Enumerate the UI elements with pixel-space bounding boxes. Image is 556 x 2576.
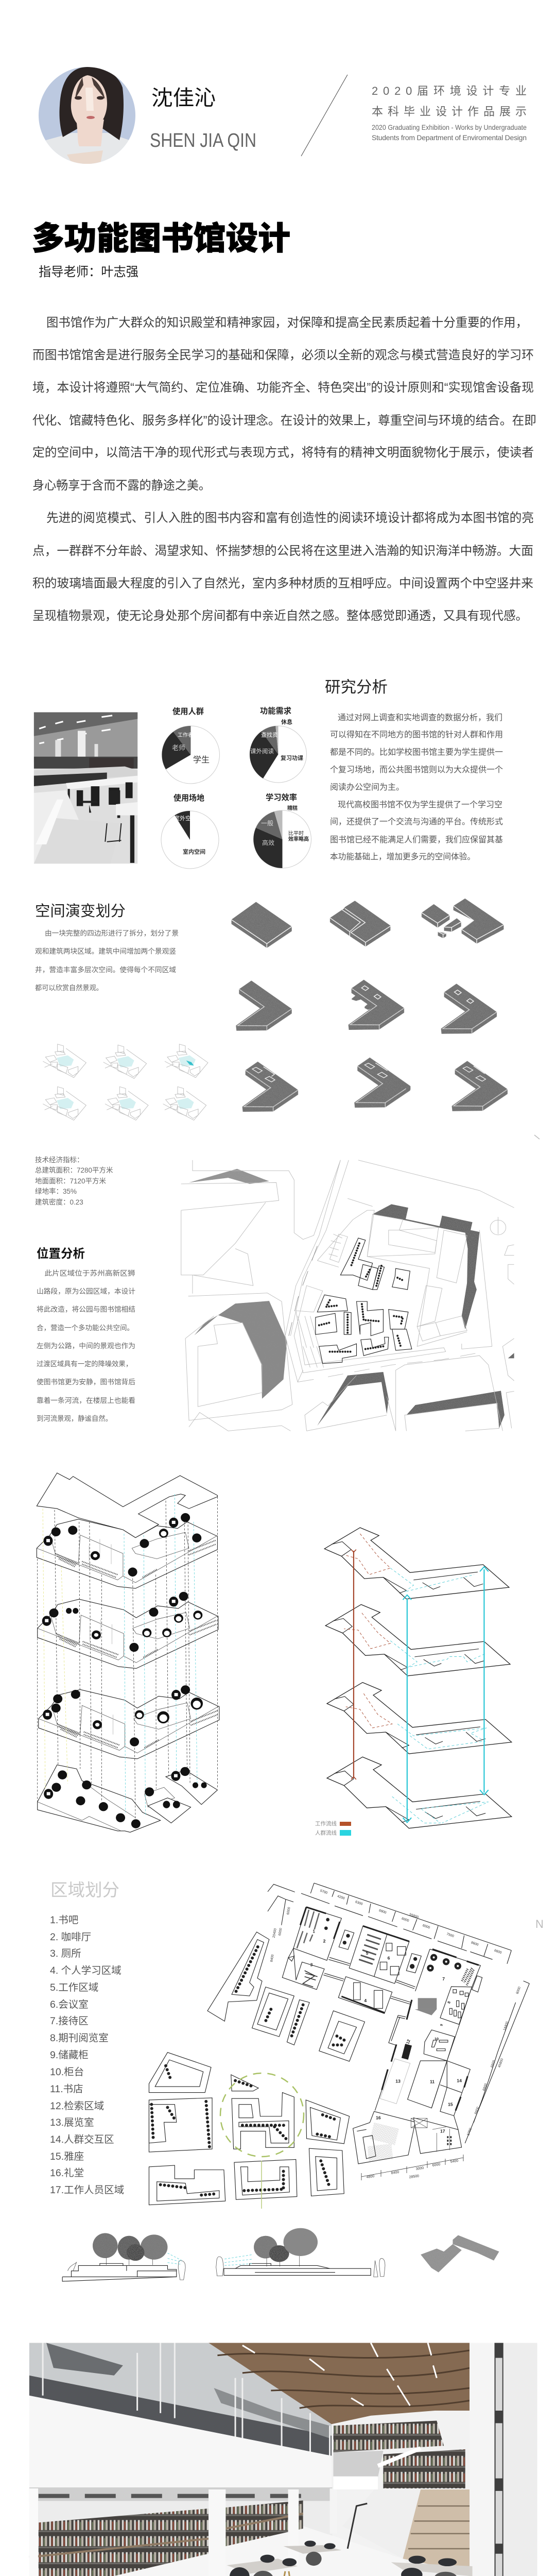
pie chart: function needs: 课外阅读 [250, 748, 274, 755]
zoning list: 8.期刊阅览室 [50, 2032, 109, 2044]
north mark: N [535, 1918, 544, 1930]
floor plan: 1 [312, 1929, 315, 1934]
zoning list: 14.人群交互区 [50, 2134, 114, 2145]
exhibition caption: 本科毕业设计作品展示 [372, 105, 527, 118]
name: 沈佳沁 [151, 86, 216, 110]
floor plan: 17 [440, 2128, 445, 2133]
floor plan: 6000 [422, 1924, 430, 1930]
technical indicators: 建筑密度：0.23 [35, 1198, 83, 1206]
research text: 个复习场地，而公共图书馆则以为大众提供一个 [330, 765, 503, 774]
bottom dimensions: 6000 [432, 2163, 441, 2167]
location text: 使图书馆更为安静，图书馆背后 [37, 1378, 135, 1386]
zoning list: 7.接待区 [50, 2015, 89, 2027]
pie chart: study efficiency: 高效 [262, 839, 274, 846]
pie chart: study efficiency [253, 792, 311, 868]
zoning list: 1.书吧 [50, 1914, 78, 1926]
intro text: 代化、馆藏特色化、服务多样化”的设计理念。在设计的效果上，尊重空间与环境的结合。在即 [32, 414, 536, 428]
massing diagrams [231, 899, 508, 1112]
zoning list: 13.展览室 [50, 2117, 94, 2128]
floor plan: 15 [448, 2102, 453, 2107]
rendering: reading hall [29, 2343, 537, 2576]
title: 多功能图书馆设计 [32, 221, 290, 257]
location text [37, 1269, 135, 1422]
zoning list: 17.工作人员区域 [50, 2184, 124, 2196]
legend: circulation: 人群流线 [315, 1829, 337, 1836]
small axonometric sketches [43, 1044, 208, 1120]
bottom dimensions: 5400 [450, 2159, 459, 2164]
heading: spatial evolution: 空间演变划分 [35, 903, 126, 920]
location text: 将此改造，将公园与图书馆相结 [37, 1306, 135, 1313]
technical indicators: 总建筑面积：7280平方米 [35, 1166, 113, 1174]
floor plan: 8400 [270, 1954, 275, 1962]
pie chart: study efficiency: 一般 [261, 819, 273, 827]
zoning list: 11.书店 [50, 2083, 83, 2095]
intro text: 境，本设计将遵照“大气简约、定位准确、功能齐全、特色突出”的设计原则和“实现馆舍设备现 [32, 381, 534, 395]
section elevations [62, 2228, 499, 2281]
bottom dimensions [361, 2155, 463, 2180]
research text: 通过对网上调查和实地调查的数据分析，我们 [338, 713, 502, 722]
pie chart: function needs: 查找资料 [261, 731, 284, 738]
pie chart: function needs [250, 706, 307, 783]
location text: 山路段，原为公园区域，本设计 [37, 1287, 135, 1295]
floor plan: 8600 [471, 1941, 479, 1947]
bottom dimensions: 28500 [409, 2174, 420, 2179]
isometric exploded floors [37, 1473, 219, 1832]
floor plan: 20400 [272, 1928, 277, 1938]
slash divider [301, 75, 348, 156]
zoning list: 5.工作区域 [50, 1982, 98, 1993]
exhibition caption [372, 84, 527, 142]
pie chart: users: 使用人群 [172, 707, 204, 716]
landscape beds [149, 1932, 364, 2205]
intro text: 积的玻璃墙面最大程度的引入了自然光，室内多种材质的互相呼应。中间设置两个中空竖井来 [32, 577, 533, 590]
floor plan: 6000 [401, 1917, 410, 1923]
floor plan: 6600 [494, 1949, 502, 1955]
heading: research analysis: 研究分析 [325, 679, 388, 696]
pie chart: venue [161, 793, 219, 869]
pie chart: users [162, 707, 219, 784]
floor plan: 6600 [482, 2083, 488, 2091]
tick mark [534, 1135, 540, 1139]
panel: spatial evolution [35, 899, 508, 1120]
location text: 到河流景观，静谧自然。 [37, 1414, 112, 1422]
zoning list: 4. 个人学习区域 [50, 1965, 121, 1976]
intro text: 而图书馆馆舍是进行服务全民学习的基础和保障，必须以全新的观念与模式营造良好的学习环 [32, 348, 534, 362]
pie chart: venue: 室内空间 [183, 848, 205, 855]
floor plan: 3 [310, 1962, 313, 1968]
floor plan: 16 [376, 2115, 381, 2120]
work circulation [344, 1534, 392, 1780]
floor plan: 14 [457, 2078, 462, 2083]
research text: 间，还提供了一个交流与沟通的平台。传统形式 [330, 817, 503, 826]
floor plan: 5 [366, 1951, 369, 1956]
pie chart: study efficiency: 学习效率 [266, 792, 297, 802]
floor plan: 6300 [355, 1900, 363, 1906]
pie chart: users: 工作者 [178, 732, 193, 738]
pinyin name: SHEN JIA QIN [150, 130, 256, 151]
research text: 现代高校图书馆不仅为学生提供了一个学习空 [338, 800, 502, 809]
research text: 本功能基础上，增加更多元的空间体验。 [330, 852, 475, 861]
floor plan: 4 [364, 1998, 367, 2003]
research text [330, 713, 503, 861]
pie chart: venue: 室外空间 [174, 815, 197, 822]
zoning list: 9.储藏柜 [50, 2049, 89, 2061]
floor plan: 6000 [278, 1928, 283, 1936]
floor plan: 7 [442, 1976, 445, 1981]
research text: 阅读办公空间为主。 [330, 783, 404, 792]
evolution text [35, 929, 179, 992]
floor plan: 7500 [446, 1933, 455, 1938]
intro text: 呈现植物景观，使无论身处那个房间都有中亲近自然之感。整体感觉即通透，又具有现代感。 [32, 609, 528, 623]
floor plan: 5700 [320, 1889, 328, 1895]
evolution text: 井，营造丰富多层次空间。使得每个不同区域 [35, 965, 176, 974]
zoning list: 16.礼堂 [50, 2167, 84, 2179]
evolution text: 由一块完整的四边形进行了拆分，划分了景 [45, 929, 179, 937]
floor plan: 45800 [498, 2058, 505, 2068]
research text: 都是不同的。比如学校图书馆主要为学生提供一 [330, 748, 503, 757]
legend: circulation [315, 1820, 351, 1836]
pie chart: venue: 使用场地 [173, 793, 204, 803]
evolution text: 观和建筑两块区域。建筑中间增加两个景观竖 [35, 947, 176, 955]
research photo [34, 713, 137, 863]
pie chart: study efficiency: 效率略高 [288, 836, 309, 842]
pie chart: study efficiency: 糟糕 [287, 805, 298, 811]
zoning list: 6.会议室 [50, 1999, 89, 2010]
advisor: 指导老师：叶志强 [39, 265, 138, 279]
floor plan: 11 [430, 2079, 435, 2084]
header [39, 67, 527, 164]
intro text: 身心畅享于含而不露的静途之美。 [32, 479, 211, 493]
research text: 图书馆已经不能满足人们需要，我们应保留其基 [330, 835, 503, 844]
zoning list: 3. 厕所 [50, 1948, 81, 1959]
icons: floor markers [42, 1513, 207, 1828]
floor plan: 6 [388, 1955, 390, 1960]
panel: location [35, 1135, 540, 1431]
floor plan: 8 [446, 2001, 451, 2004]
floor plan: 6900 [378, 1909, 387, 1915]
panel: research analysis [34, 679, 503, 869]
location text: 靠着一条河流，在楼层上也能看 [37, 1396, 135, 1404]
pie chart: function needs: 功能需求 [260, 706, 291, 716]
circulation floor plans [324, 1528, 512, 1828]
pie chart: users: 学生 [193, 755, 210, 765]
floor plan: 6600 [490, 2060, 496, 2068]
intro text: 定的空间中，以简洁干净的现代形式与表现方式，将特有的精神文明面貌物化于展示，使读者 [32, 446, 534, 460]
bottom dimensions: 8400 [391, 2171, 399, 2175]
intro text: 图书馆作为广大群众的知识殿堂和精神家园，对保障和提高全民素质起着十分重要的作用， [46, 316, 528, 330]
research text: 可以得知在不同地方的图书馆的针对人群和作用 [330, 730, 503, 739]
heading: location analysis: 位置分析 [37, 1246, 85, 1260]
pie chart: users: 老师 [172, 744, 185, 752]
highlight circle [220, 2073, 304, 2209]
evolution text: 都可以欣赏自然景观。 [35, 984, 103, 992]
location text: 过渡区域具有一定的降噪效果， [37, 1360, 132, 1368]
floor plan: 10 [435, 2037, 439, 2041]
exhibition caption: Students from Department of Enviromental Design [372, 133, 527, 142]
technical indicators: 绿地率：35% [35, 1187, 77, 1195]
floor plan: 55800 [409, 1913, 419, 1920]
exhibition caption: 2020届环境设计专业 [372, 84, 527, 97]
panel: zoning [50, 1881, 544, 2281]
people circulation [390, 1567, 489, 1823]
zoning list: 10.柜台 [50, 2066, 84, 2078]
technical indicators: 地面面积：7120平方米 [35, 1177, 107, 1185]
pie chart: study efficiency: 比平时 [288, 831, 304, 837]
floor plan: 4200 [337, 1894, 345, 1901]
zoning list [50, 1914, 124, 2196]
location text: 此片区域位于苏州高新区狮 [44, 1269, 135, 1277]
pie chart: function needs: 复习功课 [281, 754, 303, 761]
intro text: 先进的阅览模式、引人入胜的图书内容和富有创造性的阅读环境设计都将成为本图书馆的亮 [46, 511, 534, 525]
zoning list: 12.检索区域 [50, 2100, 104, 2112]
intro text: 点，一群群不分年龄、渴望求知、怀揣梦想的公民将在这里进入浩瀚的知识海洋中畅游。大面 [32, 544, 533, 558]
floor plan: 14400 [503, 2021, 510, 2031]
floor plan: 13 [395, 2079, 401, 2084]
floor plan: 5700 [467, 2127, 473, 2136]
portrait photo [39, 67, 135, 164]
bottom dimensions: 3000 [415, 2166, 424, 2171]
technical indicators [35, 1156, 113, 1206]
site plan [181, 1160, 514, 1431]
floor plan: 12 [405, 2039, 411, 2045]
floor plan [268, 1883, 529, 2164]
zoning list: 2. 咖啡厅 [50, 1931, 91, 1943]
floor plan: 6000 [286, 1907, 291, 1915]
location text: 合，营造一个多功能公共空间。 [37, 1324, 134, 1332]
legend: circulation: 工作流线 [315, 1820, 337, 1827]
exhibition caption: 2020 Graduating Exhibition - Works by Undergraduate [372, 123, 527, 131]
floor plan: 9 [440, 2024, 444, 2027]
zoning list: 15.雅座 [50, 2151, 84, 2162]
location text: 左侧为公路，中间的景观也作为 [37, 1342, 135, 1350]
technical indicators: 技术经济指标： [35, 1156, 83, 1164]
intro text [32, 316, 536, 623]
pie chart: function needs: 休息 [281, 718, 292, 725]
bottom dimensions: 4800 [366, 2175, 375, 2179]
floor plan: 6600 [474, 2106, 480, 2115]
floor plan: 2 [323, 1939, 326, 1944]
floor plan: 6000 [516, 1986, 522, 1995]
heading: zoning: 区域划分 [50, 1881, 119, 1900]
